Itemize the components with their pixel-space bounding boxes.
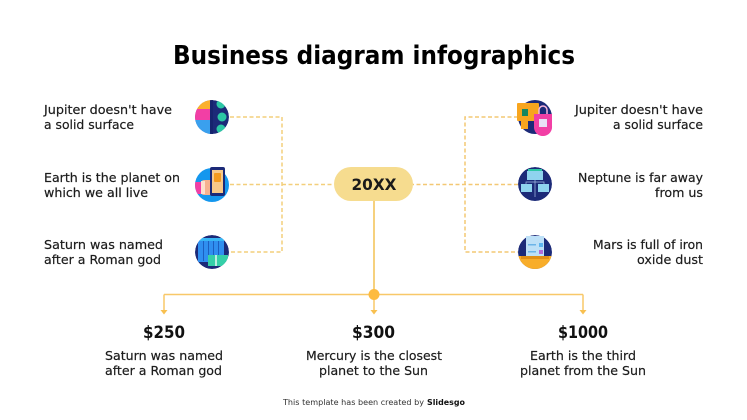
icon: document in tray [518, 235, 552, 270]
left text: Saturn: Saturn was named [44, 237, 163, 252]
icon: phone in hand [195, 167, 229, 202]
left text: Jupiter: Jupiter doesn't have [43, 102, 172, 117]
column: $1000 [520, 323, 646, 378]
column: $300: $300 [352, 323, 395, 343]
icon: building with banknotes [195, 235, 229, 269]
left text: Saturn: after a Roman god [44, 252, 161, 267]
left dashed connectors [230, 117, 334, 252]
column: $1000: Earth is the third [530, 348, 636, 363]
vertical connector [373, 201, 375, 295]
left text: Jupiter: a solid surface [44, 117, 134, 132]
icon: network of windows [518, 167, 552, 201]
left text: Earth: Earth is the planet on [44, 170, 180, 185]
column: $250: after a Roman god [105, 363, 222, 378]
column: $250: Saturn was named [105, 348, 223, 363]
right text: Mars: Mars is full of iron [593, 237, 703, 252]
column: $1000: planet from the Sun [520, 363, 646, 378]
right text: Neptune [578, 170, 704, 200]
column: $300: Mercury is the closest [306, 348, 442, 363]
right text: Jupiter: a solid surface [613, 117, 703, 132]
right dashed connectors [413, 117, 518, 252]
left text: Earth: which we all live [44, 185, 148, 200]
arrow heads [160, 310, 586, 314]
central pill: 20XX: 20XX [352, 175, 397, 194]
right text: Neptune: Neptune is far away [578, 170, 704, 185]
branch line with arrows [164, 294, 583, 312]
right text: Jupiter [574, 102, 703, 132]
column: $250 [105, 323, 223, 378]
column: $300 [306, 323, 442, 378]
junction dot [368, 289, 380, 300]
column: $300: planet to the Sun [319, 363, 428, 378]
left text: Earth [44, 170, 180, 200]
footer credit: This template has been created by [282, 398, 425, 407]
right text: Jupiter: Jupiter doesn't have [574, 102, 703, 117]
left text: Saturn [44, 237, 163, 267]
icon: checklist [195, 100, 229, 134]
column: $250: $250 [143, 323, 185, 343]
right text: Neptune: from us [655, 185, 703, 200]
left text: Jupiter [43, 102, 172, 132]
right text: Mars: oxide dust [637, 252, 703, 267]
central pill: 20XX [334, 167, 413, 201]
footer credit: Slidesgo [427, 398, 465, 407]
right text: Mars [593, 237, 703, 267]
column: $1000: $1000 [558, 323, 608, 343]
title: Business diagram infographics [173, 41, 575, 71]
icon: puzzle and shopping bag [517, 100, 552, 136]
